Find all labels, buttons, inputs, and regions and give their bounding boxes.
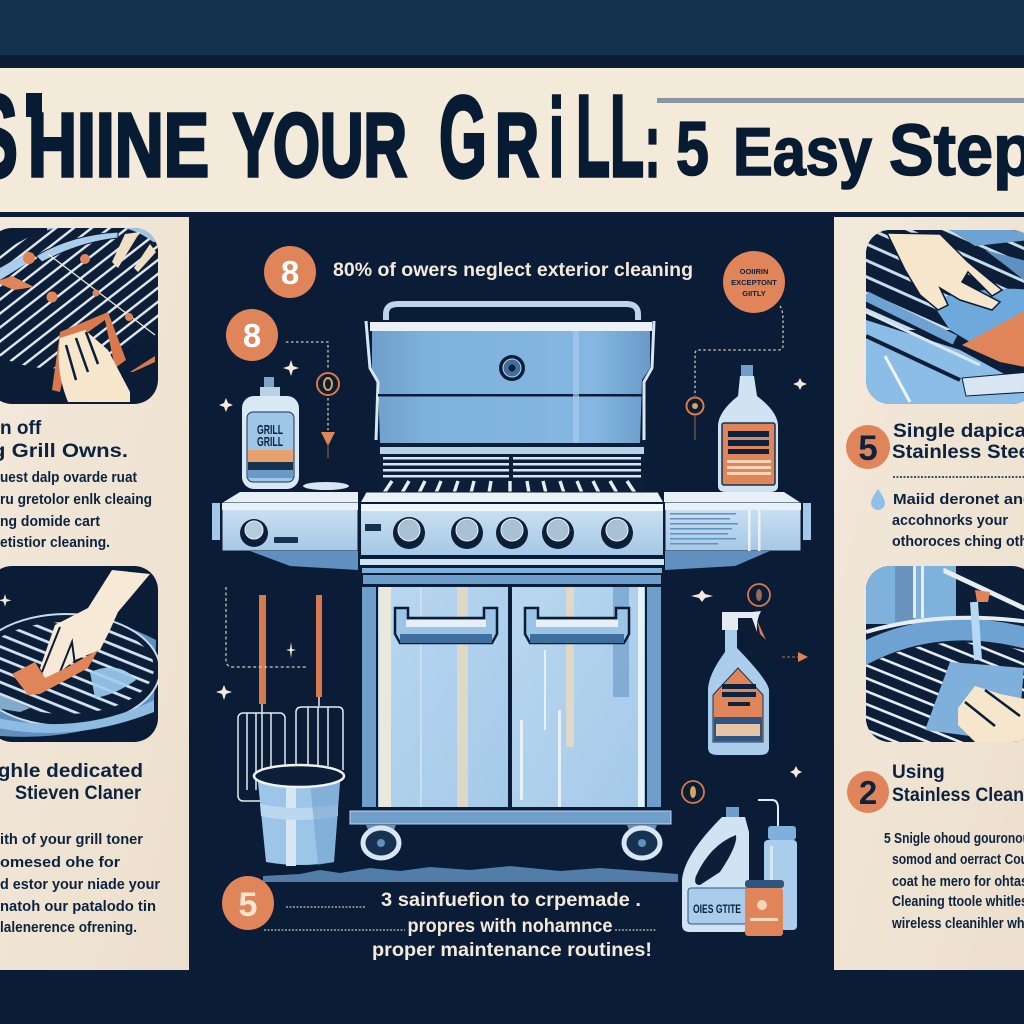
- step text: stainless steel: Maiid deronet and: [893, 491, 1024, 508]
- dashed connector: right bottle: [686, 306, 783, 440]
- stat text: 80% of owers neglect exterior cleaning: [333, 260, 693, 281]
- title: subtitle: Easy: [733, 114, 872, 190]
- title: main: G: [439, 72, 487, 202]
- title: subtitle: [657, 98, 1024, 192]
- jar: [745, 880, 784, 936]
- dotted leaders: [264, 907, 656, 930]
- step badge: 5 bottom: 5: [239, 886, 257, 924]
- title: main: LL: [576, 71, 644, 201]
- small dish on shelf: [303, 482, 349, 490]
- right cleaner bottle: [718, 365, 778, 492]
- grill: [212, 304, 811, 858]
- panel: left steps: [0, 203, 190, 970]
- stat badge: 8 top: [264, 246, 316, 298]
- step text: dedicated cleaner: omesed ohe for: [0, 854, 120, 871]
- title: main: :: [645, 96, 660, 196]
- cleaning tools: [238, 595, 344, 866]
- grill lid: [366, 321, 654, 443]
- step heading: using stainless cleaner: [892, 762, 1024, 806]
- step badge: 5: [846, 425, 890, 469]
- title: main: HIINE: [28, 96, 209, 196]
- step badge: 2: 2: [859, 774, 877, 811]
- icon: detergent marker: [682, 781, 704, 803]
- stat badge: 8 second: 8: [243, 317, 261, 354]
- bucket: [254, 765, 344, 866]
- grill interior and grates: [378, 444, 644, 493]
- closing text: [372, 890, 652, 961]
- lid handle: [386, 304, 638, 320]
- top band: [0, 0, 1024, 55]
- step heading: stainless steel: [892, 421, 1024, 463]
- orange callout badge: [723, 251, 785, 313]
- title: subtitle: 5: [676, 107, 709, 192]
- right side shelf: [664, 492, 811, 570]
- step heading: stainless steel: Single dapicat: [893, 421, 1024, 442]
- pump bottle: [758, 800, 797, 930]
- dashed connector: tools: [226, 587, 308, 667]
- step text: using stainless cleaner: [884, 830, 1024, 932]
- orange callout badge: OOIIRIN: [740, 267, 768, 276]
- closing text: 3 sainfuefion to crpemade .: [381, 890, 641, 911]
- icon: water drop: [871, 489, 885, 510]
- icon: spray marker: [748, 584, 770, 606]
- step heading: using stainless cleaner: Using: [892, 762, 945, 783]
- step text: turn off: ng domide cart: [0, 513, 100, 530]
- stat badge: 8 second: [226, 309, 278, 361]
- left cleaner bottle: [242, 377, 299, 489]
- step heading: stainless steel: Stainless Stee: [892, 442, 1024, 463]
- step text: turn off: uest dalp ovarde ruat: [0, 469, 137, 486]
- step text: turn off: etistior cleaning.: [0, 534, 110, 551]
- left cleaner bottle: GRILL: [257, 434, 283, 449]
- small arrow: [782, 652, 808, 662]
- spray bottle: [708, 611, 769, 755]
- panel: right steps: [834, 217, 1024, 970]
- step text: turn off: ru gretolor enlk cleaing: [0, 491, 152, 508]
- orange callout badge: GIITLY: [742, 289, 766, 298]
- illustration: wiping grate: [0, 566, 160, 742]
- step text: dedicated cleaner: [0, 831, 160, 936]
- illustration: scrubbing grate with cloth: [0, 228, 158, 404]
- wheels: [363, 825, 660, 858]
- tool brush heads: [238, 697, 343, 801]
- stat badge: 8 top: 8: [281, 254, 299, 291]
- closing text: propres with nohamnce: [408, 916, 612, 937]
- detergent jug: OIES GTITE: [693, 902, 741, 916]
- step heading: dedicated cleaner: Stieven Claner: [15, 783, 142, 804]
- left cleaner bottle: GRILL: [257, 422, 283, 437]
- ground strip: [263, 866, 678, 882]
- closing text: proper maintenance routines!: [372, 940, 652, 961]
- step text: dedicated cleaner: natoh our patalodo tin: [0, 898, 156, 915]
- illustration: rinsing grate: [866, 566, 1024, 742]
- step badge: 5 bottom: [222, 876, 274, 930]
- title: main: [0, 71, 660, 203]
- control panel with knobs: [360, 492, 664, 584]
- step badge: 2: [847, 771, 889, 813]
- sparkles: [216, 360, 807, 778]
- step text: stainless steel: [892, 491, 1024, 550]
- left side shelf: [212, 492, 358, 570]
- step heading: turn off: n off: [0, 418, 42, 439]
- step heading: turn off: [0, 418, 128, 462]
- cleaning supplies: [682, 800, 797, 936]
- step badge: 5: 5: [858, 429, 878, 468]
- cabinet with doors: [350, 587, 671, 858]
- step text: dedicated cleaner: ith of your grill toner: [0, 831, 143, 848]
- step heading: dedicated cleaner: [0, 761, 143, 804]
- step text: dedicated cleaner: d estor your niade your: [0, 876, 160, 893]
- title: main: i: [549, 77, 564, 200]
- left door: [378, 587, 508, 807]
- step text: dedicated cleaner: lalenerence ofrening.: [0, 919, 137, 936]
- step text: stainless steel: accohnorks your: [892, 512, 1008, 529]
- title: main: YOUR: [233, 96, 407, 196]
- right door: [512, 587, 645, 807]
- title: main: R: [495, 96, 539, 196]
- orange callout badge: EXCEPTONT: [731, 278, 777, 287]
- tool handles: [259, 595, 266, 704]
- illustration: polishing exterior with cloth: [866, 230, 1024, 404]
- step text: turn off: [0, 469, 152, 551]
- dashed connector: left bottle: [286, 342, 339, 458]
- title banner: [0, 68, 1024, 212]
- base shelf: [350, 811, 671, 824]
